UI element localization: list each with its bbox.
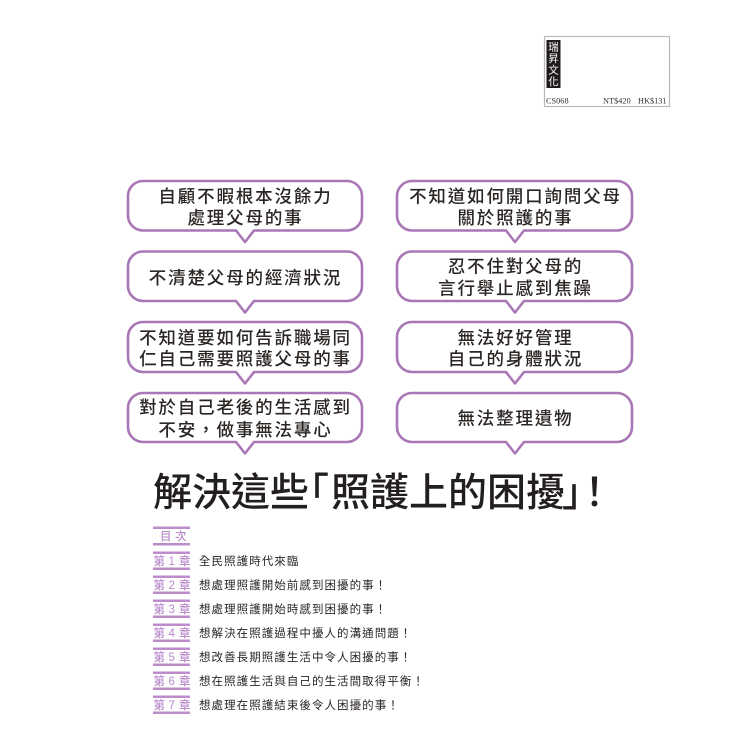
speech bubble 7: 對於自己老後的生活感到 bbox=[139, 398, 352, 418]
speech bubble 7 bbox=[128, 393, 362, 454]
chapter 5: 章 bbox=[179, 650, 190, 664]
chapter 1: 第 bbox=[154, 554, 166, 568]
book code and price: CS068 bbox=[546, 96, 569, 106]
chapter 7: 想處理在照護結束後令人困擾的事！ bbox=[199, 698, 400, 712]
contents heading bbox=[153, 526, 190, 546]
book code and price: NT$420 bbox=[603, 96, 631, 106]
speech bubble 1: 處理父母的事 bbox=[187, 208, 304, 228]
chapter 3: 第 bbox=[154, 602, 166, 616]
speech bubble 2 bbox=[397, 181, 632, 242]
chapter 2: 2 bbox=[168, 580, 175, 592]
chapter 3: 想處理照護開始時感到困擾的事！ bbox=[199, 602, 387, 616]
chapter 1: 章 bbox=[179, 554, 190, 568]
speech bubble 3: 不清楚父母的經濟狀況 bbox=[149, 268, 342, 288]
speech bubble 4: 忍不住對父母的 bbox=[448, 256, 583, 276]
chapter 7: 7 bbox=[168, 700, 175, 712]
chapter 2 bbox=[153, 576, 387, 594]
publisher box bbox=[544, 36, 670, 106]
chapter 3: 章 bbox=[179, 602, 190, 616]
chapter 5: 想改善長期照護生活中令人困擾的事！ bbox=[199, 650, 412, 664]
chapter 2: 章 bbox=[179, 578, 190, 592]
book code and price bbox=[546, 96, 667, 106]
publisher logo bbox=[546, 40, 560, 88]
speech bubble 6 bbox=[397, 322, 632, 384]
speech bubble 3 bbox=[128, 252, 362, 312]
contents heading: 目 bbox=[160, 530, 172, 543]
chapter 4: 4 bbox=[168, 628, 176, 640]
chapter 7: 第 bbox=[154, 698, 166, 712]
chapter 5: 5 bbox=[168, 652, 175, 664]
chapter 1: 1 bbox=[168, 556, 175, 568]
publisher logo: 化 bbox=[548, 76, 559, 88]
chapter 4: 章 bbox=[179, 626, 190, 640]
speech bubble 5 bbox=[128, 322, 362, 384]
chapter 3 bbox=[153, 600, 387, 618]
speech bubble 6: 無法好好管理 bbox=[457, 328, 574, 348]
speech bubble 5: 不知道要如何告訴職場同 bbox=[139, 328, 352, 348]
chapter 5: 第 bbox=[154, 650, 166, 664]
chapter 6 bbox=[153, 672, 425, 690]
publisher logo: 文 bbox=[548, 64, 559, 76]
speech bubble 4: 言行舉止感到焦躁 bbox=[438, 278, 593, 298]
speech bubble 2: 不知道如何開口詢問父母 bbox=[409, 186, 622, 206]
chapter 4: 想解決在照護過程中擾人的溝通問題！ bbox=[199, 626, 412, 640]
table of contents bbox=[153, 526, 425, 714]
chapter 6: 6 bbox=[168, 676, 175, 688]
speech bubble 6: 自己的身體狀況 bbox=[448, 349, 583, 369]
speech bubble 1 bbox=[128, 181, 362, 242]
chapter 4 bbox=[153, 624, 412, 642]
chapter 5 bbox=[153, 648, 412, 666]
speech bubble 4 bbox=[397, 252, 632, 312]
chapter 1: 全民照護時代來臨 bbox=[199, 554, 299, 568]
chapter 2: 想處理照護開始前感到困擾的事！ bbox=[199, 578, 387, 592]
book code and price: HK$131 bbox=[638, 96, 667, 106]
chapter 6: 章 bbox=[179, 674, 190, 688]
chapter 2: 第 bbox=[154, 578, 166, 592]
chapter 7 bbox=[153, 696, 400, 714]
speech bubble 7: 不安，做事無法專心 bbox=[158, 420, 333, 440]
speech bubble 1: 自顧不暇根本沒餘力 bbox=[158, 186, 333, 206]
publisher logo: 昇 bbox=[548, 53, 559, 65]
speech bubble 8 bbox=[397, 393, 632, 454]
publisher logo: 瑞 bbox=[548, 42, 559, 54]
chapter 6: 想在照護生活與自己的生活間取得平衡！ bbox=[199, 674, 425, 688]
contents heading: 次 bbox=[175, 529, 187, 543]
main heading: 解決這些「照護上的困擾」！ bbox=[153, 472, 614, 515]
speech bubble 8: 無法整理遺物 bbox=[457, 408, 574, 428]
chapter 3: 3 bbox=[168, 604, 175, 616]
chapter 7: 章 bbox=[179, 698, 190, 712]
chapter 1 bbox=[153, 552, 299, 570]
speech bubble 2: 關於照護的事 bbox=[457, 208, 574, 228]
speech bubble 5: 仁自己需要照護父母的事 bbox=[139, 349, 352, 369]
chapter 4: 第 bbox=[154, 626, 166, 640]
chapter 6: 第 bbox=[154, 674, 166, 688]
